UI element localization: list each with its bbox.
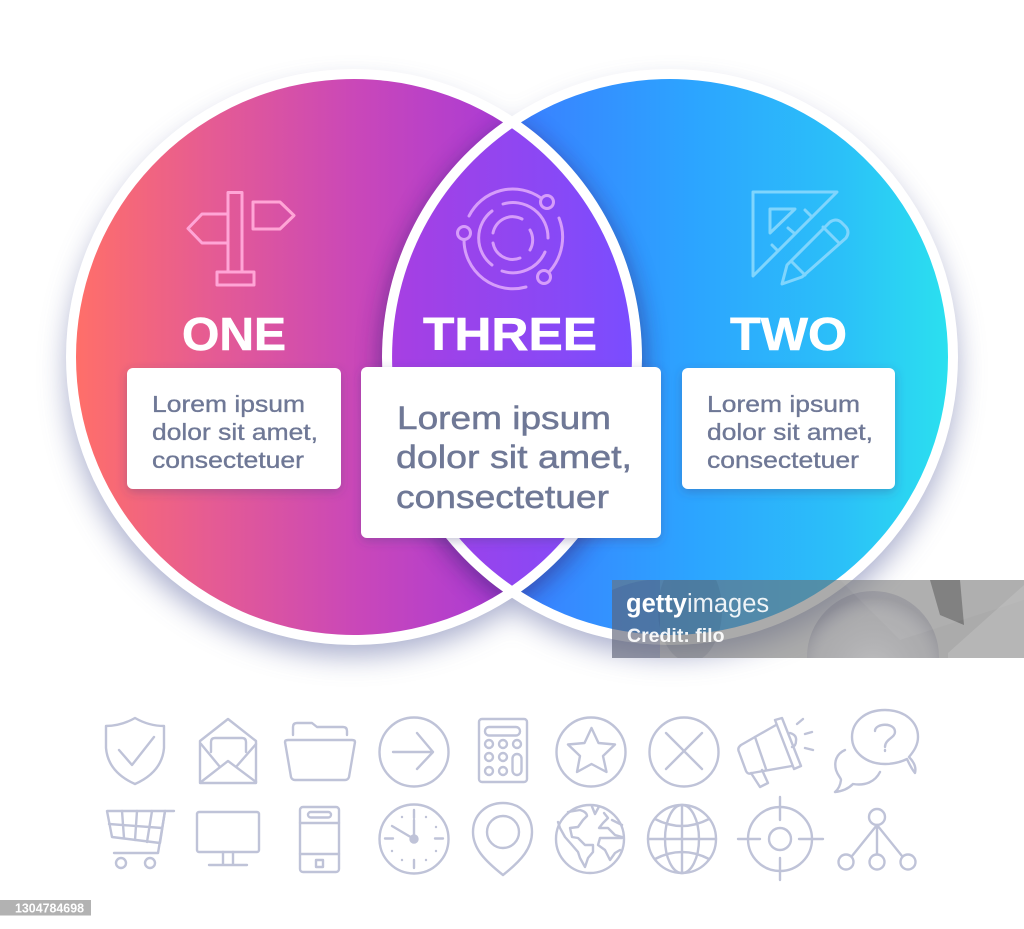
icon: map pin [473, 803, 532, 875]
icon: megaphone [738, 718, 813, 787]
watermark banner [612, 580, 1024, 658]
heading: three: THREE [423, 308, 597, 360]
card: two: dolor sit amet, [707, 419, 873, 445]
card: three: consectetuer [396, 479, 609, 515]
venn diagram [66, 69, 958, 656]
icon: globe [648, 805, 716, 873]
card: three: Lorem ipsum [397, 400, 611, 436]
card: two [682, 368, 895, 489]
heading: two: TWO [730, 308, 847, 360]
icon: close circle [650, 718, 718, 786]
card: one: Lorem ipsum [152, 391, 305, 417]
card: three [361, 367, 661, 538]
icon: phone [300, 807, 339, 872]
card: two: Lorem ipsum [707, 391, 860, 417]
icon: calculator [479, 719, 527, 782]
icon set [106, 710, 918, 880]
card: one: consectetuer [152, 447, 304, 473]
icon: star circle [556, 718, 626, 786]
icon: speech bubbles [835, 710, 918, 792]
icon: earth [556, 805, 624, 873]
icon: ruler and pencil [753, 192, 848, 284]
card: one: dolor sit amet, [152, 419, 318, 445]
image id tag: 1304784698 [15, 900, 84, 916]
icon: cart [107, 811, 174, 868]
circle two [521, 79, 948, 635]
circle one [76, 79, 503, 635]
icon: shield [106, 718, 164, 784]
icon: signpost [188, 192, 294, 285]
icon: network [838, 809, 916, 870]
icon: folder [285, 723, 355, 780]
watermark credit: Credit: filo [627, 625, 725, 647]
icon: target [738, 797, 823, 880]
heading: one: ONE [182, 308, 286, 360]
overlap three [392, 128, 632, 586]
drop shadow [67, 86, 957, 656]
watermark logo: gettyimages [626, 590, 769, 618]
card: one [127, 368, 341, 489]
icon: arrow circle [380, 718, 448, 786]
icon: monitor [197, 812, 259, 865]
icon: orbit [458, 189, 563, 289]
icon: envelope [200, 719, 256, 783]
card: two: consectetuer [707, 447, 859, 473]
icon: clock [380, 804, 448, 874]
overlap shadow on circles [380, 122, 644, 606]
white circle outlines [66, 69, 958, 645]
card: three: dolor sit amet, [396, 439, 632, 475]
